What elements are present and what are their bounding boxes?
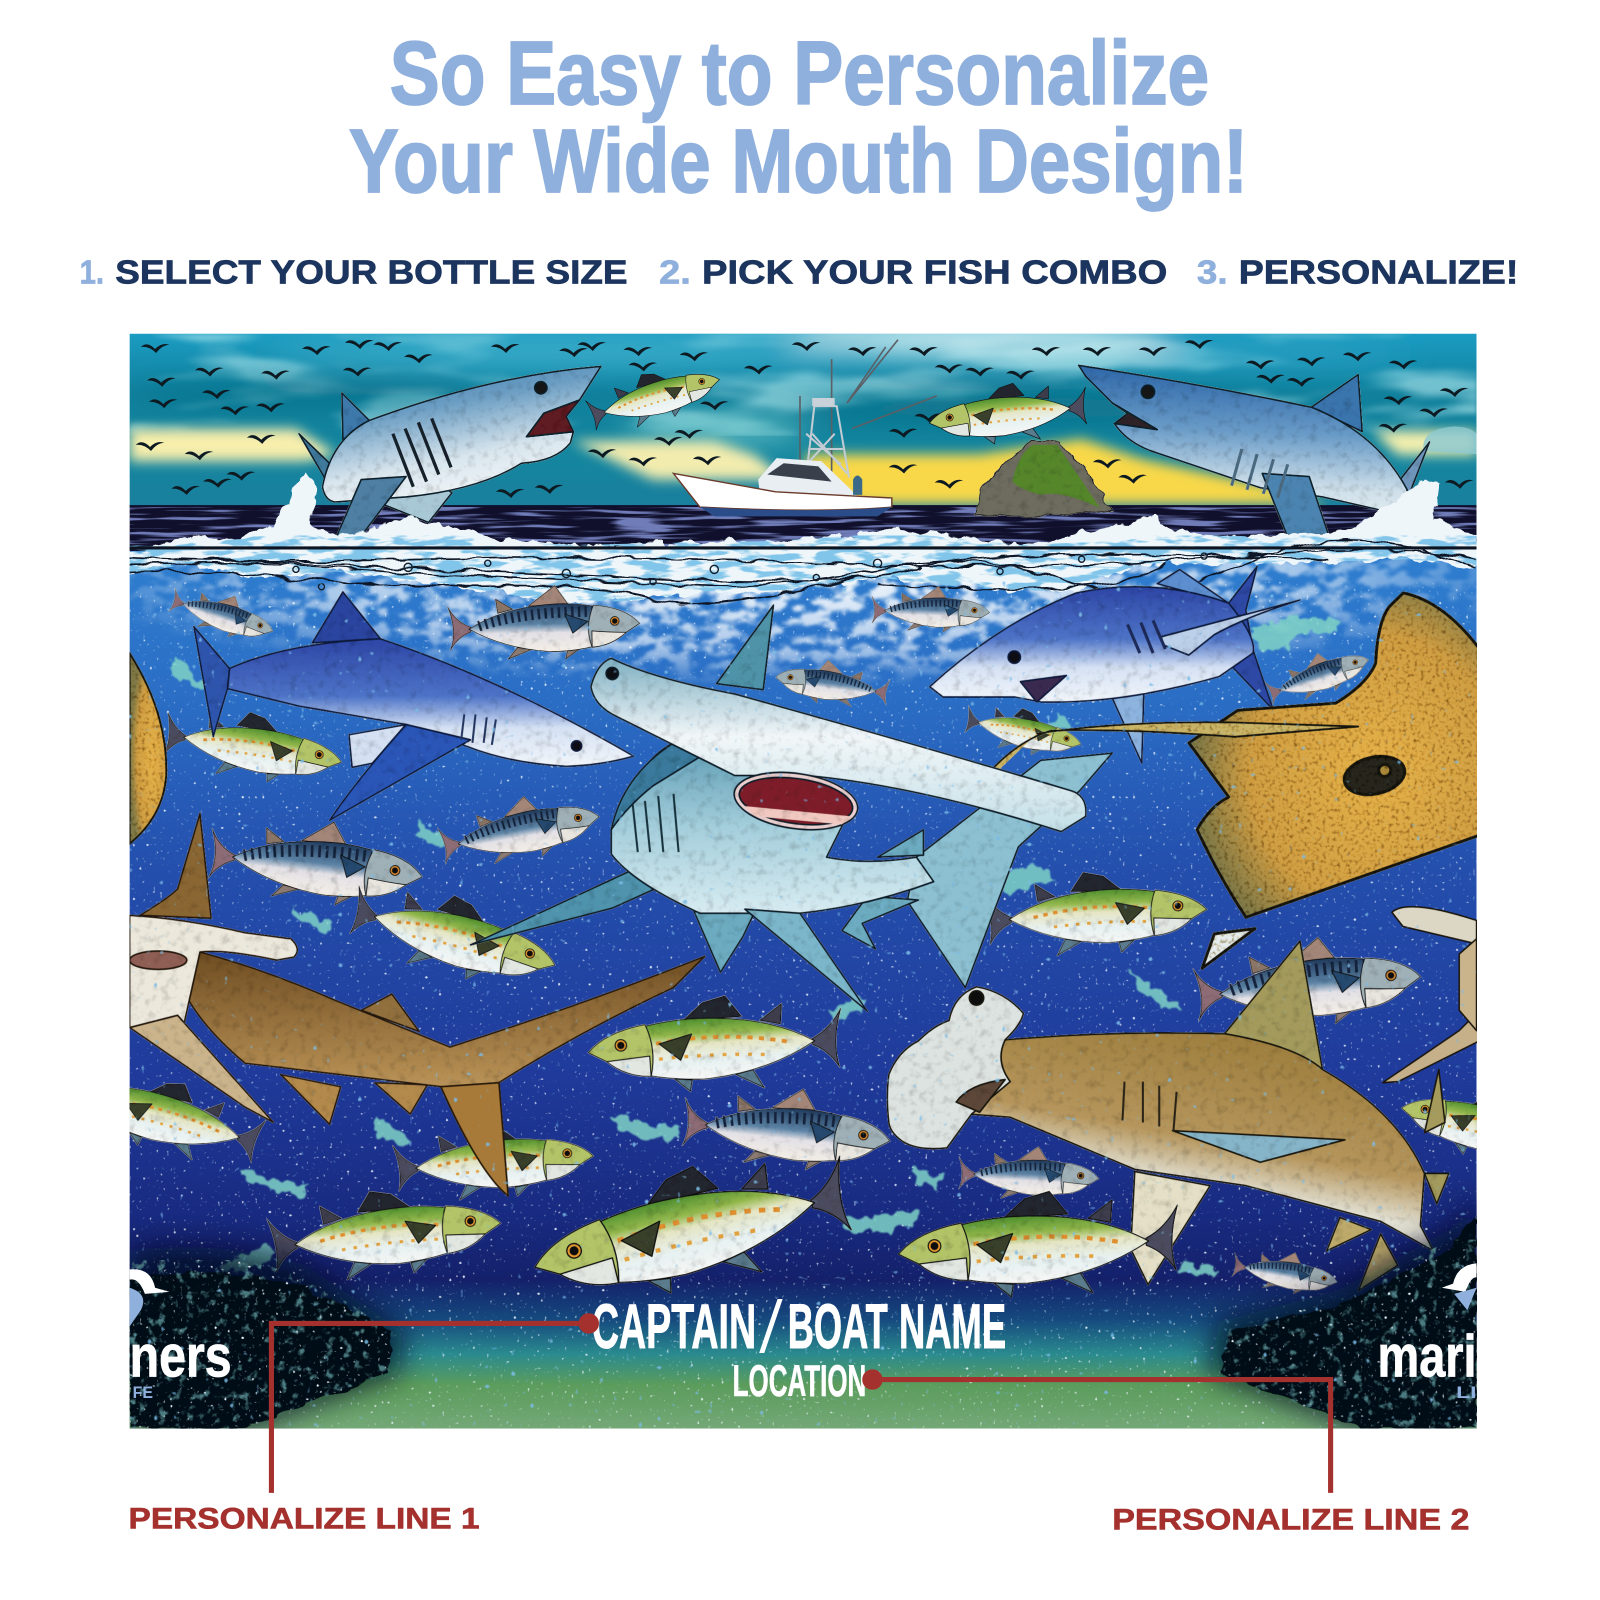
logo right	[1378, 1263, 1477, 1402]
logo left	[130, 1269, 232, 1402]
logo right: mari	[1378, 1323, 1477, 1390]
slash divider in boat name	[759, 1299, 783, 1353]
dark sea at the horizon	[130, 505, 1477, 551]
logo left: ners	[130, 1323, 232, 1390]
brown hammerhead shark left	[130, 813, 705, 1196]
breaching shark left	[299, 366, 601, 543]
title	[349, 24, 1248, 212]
flock of birds	[136, 340, 1473, 498]
personalized location text: LOCATION	[733, 1355, 866, 1406]
stingray right	[969, 593, 1490, 968]
steps row: PICK YOUR FISH COMBO	[702, 255, 1167, 292]
personalized boat name text: BOAT	[788, 1292, 888, 1362]
flying fish pair	[585, 374, 1087, 444]
title: Your Wide Mouth Design!	[349, 112, 1248, 212]
blue mako shark left	[194, 592, 634, 820]
tan hammerhead shark right	[887, 941, 1449, 1291]
steps row: 1.	[80, 255, 104, 292]
label: personalize line 2: PERSONALIZE LINE 2	[1112, 1504, 1469, 1537]
reef left	[130, 1247, 403, 1429]
title: So Easy to Personalize	[390, 24, 1209, 124]
boat	[673, 340, 937, 516]
panel: ocean illustration	[130, 334, 1477, 1429]
blue shark right	[930, 566, 1300, 763]
logo left: FE	[133, 1384, 153, 1402]
foreground fish	[534, 1156, 1338, 1298]
logo right: LI	[1456, 1384, 1477, 1402]
steps row: 3.	[1197, 255, 1228, 292]
reef right	[1209, 1194, 1477, 1429]
callout line 2	[865, 1372, 1331, 1493]
mid-water fish	[342, 696, 1423, 1033]
brown shark tail over fish	[441, 1083, 508, 1196]
callout line 1	[271, 1316, 596, 1493]
rock island	[977, 440, 1111, 515]
breaching shark right	[1079, 365, 1430, 535]
personalized boat name text: NAME	[899, 1292, 1006, 1362]
small background mackerel school	[159, 578, 1375, 915]
left ray edge	[130, 653, 166, 844]
surface foam band	[130, 471, 1477, 607]
steps row: PERSONALIZE!	[1239, 255, 1518, 292]
sky	[130, 322, 1477, 507]
underwater background	[130, 551, 1477, 1429]
teal water blotches	[171, 617, 1340, 1278]
paint speckle overlay	[130, 582, 1477, 1429]
lower fish school	[130, 995, 1477, 1281]
steps row	[80, 255, 1518, 292]
personalized boat name text: CAPTAIN	[592, 1292, 756, 1362]
steps row: 2.	[659, 255, 691, 292]
label: personalize line 1: PERSONALIZE LINE 1	[129, 1503, 480, 1536]
right edge hammerhead	[1383, 907, 1490, 1133]
steps row: SELECT YOUR BOTTLE SIZE	[115, 255, 628, 292]
blue hammerhead shark centre	[470, 605, 1112, 1011]
